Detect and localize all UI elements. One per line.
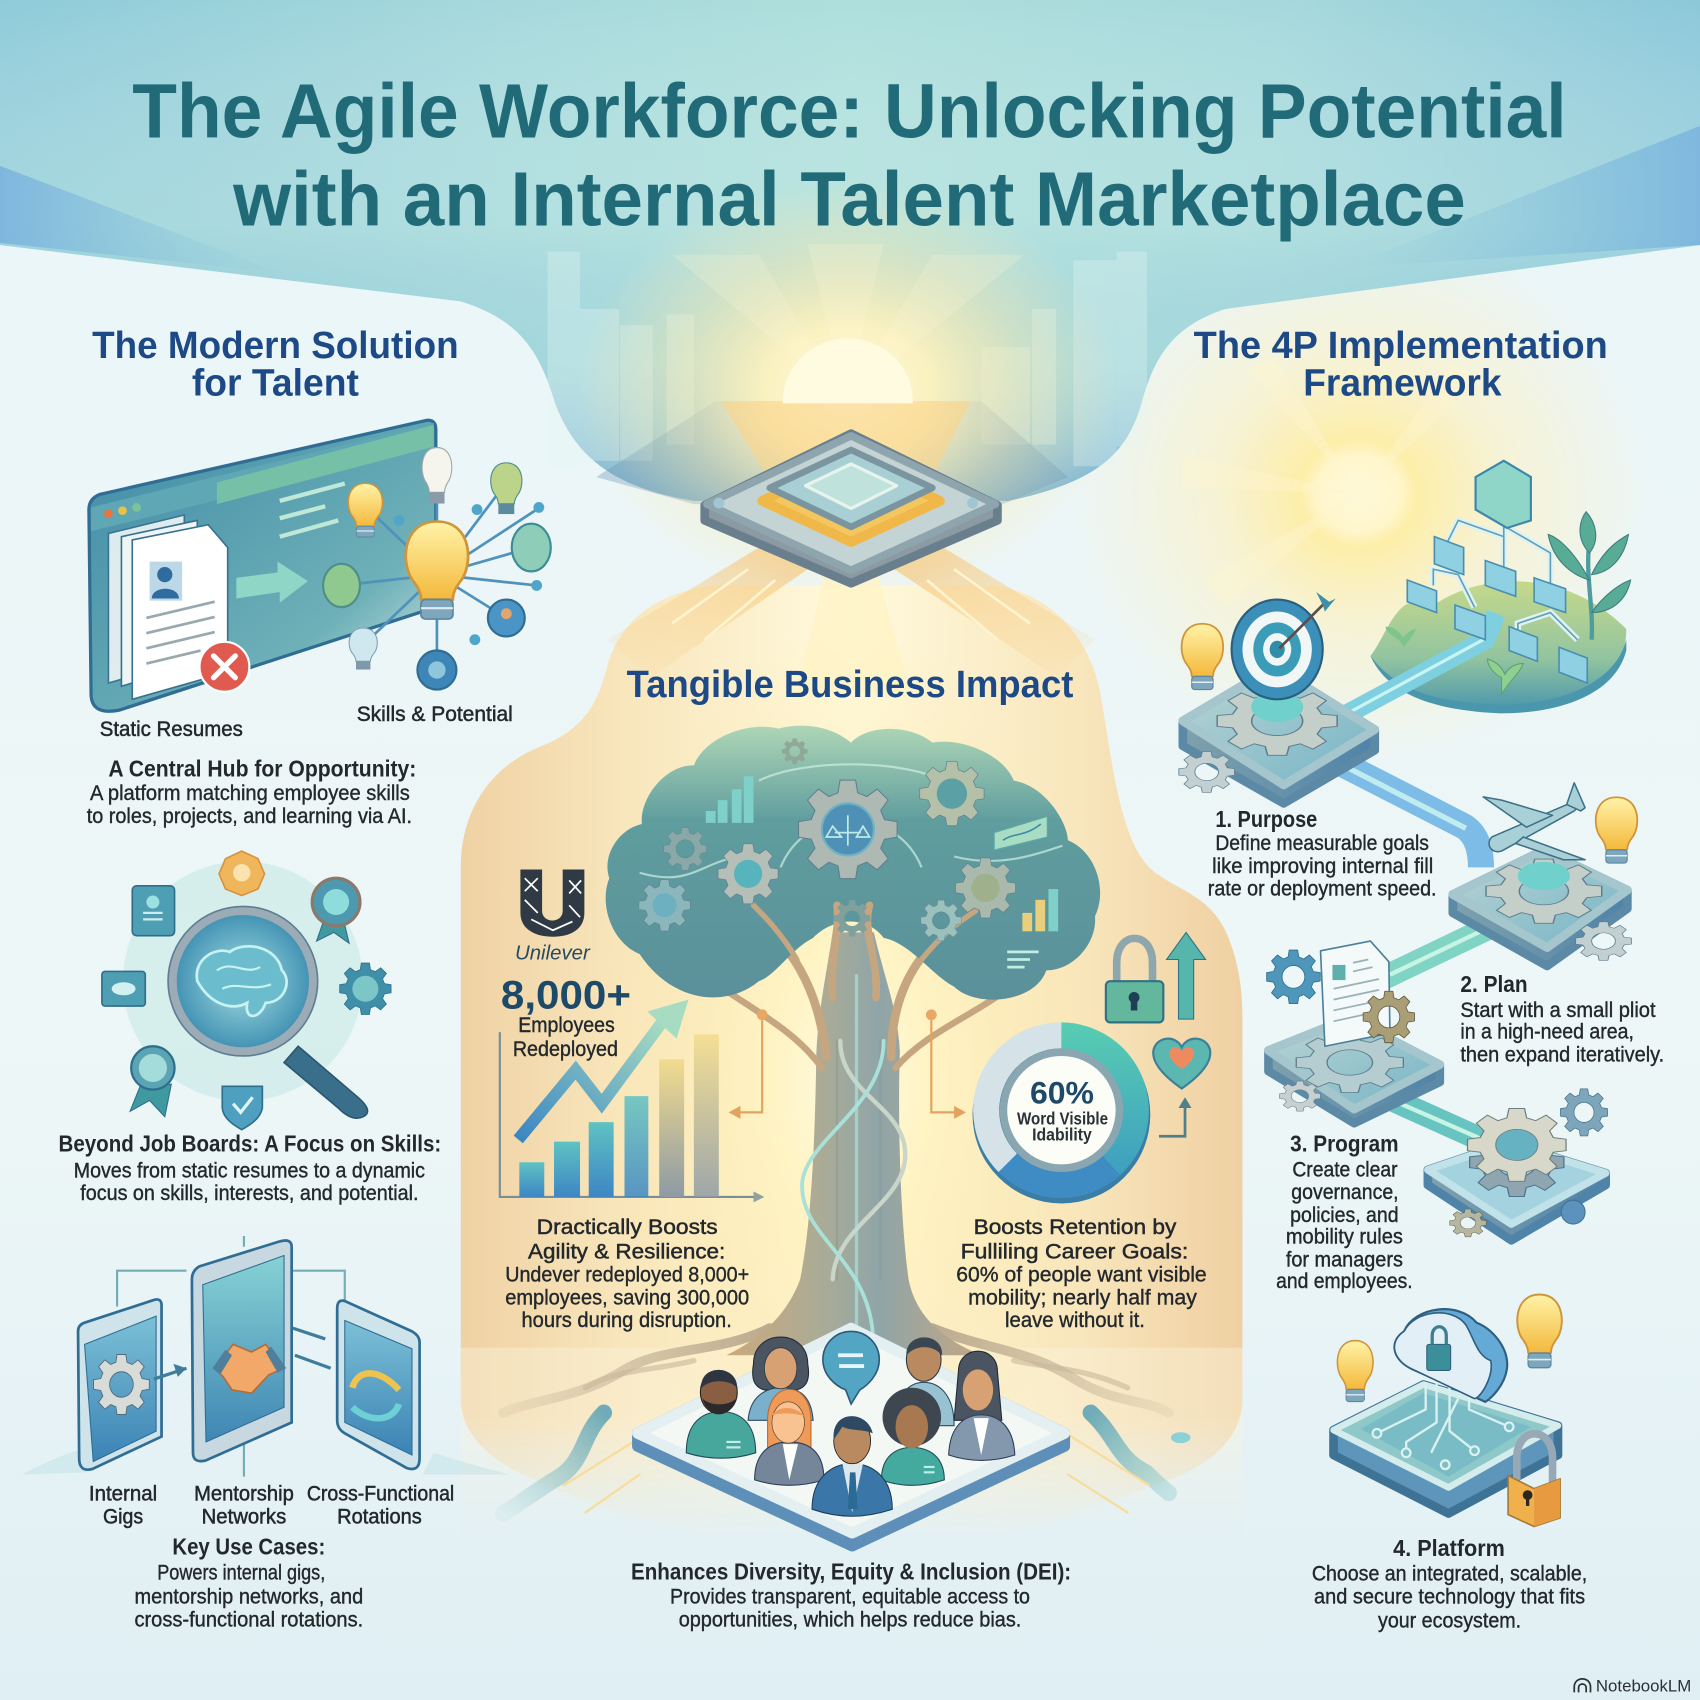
stat: 8,000+ employees redeployed: Redeployed bbox=[513, 1038, 618, 1061]
text: key use cases bbox=[134, 1534, 363, 1631]
text: agility and resilience bbox=[505, 1214, 749, 1332]
step 3 text: Create clear bbox=[1292, 1158, 1398, 1181]
text: DEI: opportunities, which helps reduce bias. bbox=[679, 1608, 1021, 1631]
text: key use cases: Key Use Cases: bbox=[172, 1534, 325, 1560]
person: bearded man bbox=[686, 1370, 756, 1458]
device labels: Mentorship bbox=[194, 1481, 294, 1506]
stat: 8,000+ employees redeployed: 8,000+ bbox=[501, 973, 631, 1017]
device labels bbox=[89, 1481, 454, 1528]
device labels: Cross-Functional bbox=[307, 1481, 454, 1506]
step 1 text: 1. Purpose bbox=[1215, 806, 1317, 832]
text: key use cases: Powers internal gigs, bbox=[157, 1562, 325, 1585]
device labels: Networks bbox=[202, 1503, 286, 1528]
central glow behind tree bbox=[580, 629, 1122, 1540]
translucent skyline and light rays bbox=[548, 179, 1147, 602]
heading: 4P framework bbox=[1194, 325, 1608, 405]
diverse team platform bbox=[638, 1328, 1065, 1546]
illustration: connected devices bbox=[22, 1236, 510, 1477]
title: The Agile Workforce: Unlocking Potential bbox=[132, 69, 1567, 155]
donut chart: 60 percent: Word Visible bbox=[1017, 1108, 1108, 1128]
text: beyond job boards: focus on skills, interests, and potential. bbox=[80, 1182, 418, 1205]
connector right bbox=[926, 1009, 966, 1119]
text: boosts retention: mobility; nearly half may bbox=[968, 1286, 1197, 1309]
step 2 text: Start with a small pliot bbox=[1460, 999, 1656, 1022]
device labels: Rotations bbox=[337, 1503, 422, 1528]
target bbox=[1232, 592, 1336, 699]
step 3 text: mobility rules bbox=[1286, 1226, 1403, 1249]
text: central hub bbox=[87, 755, 416, 828]
cloud with lock bbox=[1394, 1309, 1507, 1402]
text: agility and resilience: Dractically Boosts bbox=[537, 1214, 718, 1239]
unilever logo bbox=[515, 870, 591, 965]
light beams from hub bbox=[607, 548, 1095, 694]
step 1 text: like improving internal fill bbox=[1212, 855, 1433, 878]
text: central hub: to roles, projects, and learning via AI. bbox=[87, 805, 412, 828]
step 3 second platform with big gear bbox=[1428, 1089, 1608, 1240]
step 1 text: Define measurable goals bbox=[1215, 832, 1429, 855]
person: top right bbox=[894, 1337, 954, 1426]
person: orange hair woman bbox=[755, 1389, 824, 1485]
step 3 text bbox=[1276, 1130, 1413, 1293]
text: boosts retention: Fulliling Career Goals: bbox=[961, 1239, 1188, 1264]
step 2 text: 2. Plan bbox=[1460, 971, 1528, 997]
person: right woman bbox=[949, 1351, 1015, 1460]
device labels: Internal bbox=[89, 1481, 157, 1506]
text: boosts retention: 60% of people want visible bbox=[956, 1264, 1207, 1287]
right sun glow bbox=[1066, 222, 1651, 764]
step 4 text: and secure technology that fits bbox=[1314, 1586, 1585, 1609]
text: DEI bbox=[631, 1559, 1071, 1631]
text: boosts retention bbox=[956, 1214, 1207, 1332]
heading: 4P framework: Framework bbox=[1303, 363, 1502, 405]
illustration: resumes to skills window bbox=[89, 420, 551, 711]
step 4 text: 4. Platform bbox=[1393, 1535, 1505, 1561]
step 2 platform and plane bbox=[1453, 783, 1637, 966]
person: top left bbox=[748, 1337, 813, 1420]
text: agility and resilience: hours during disruption. bbox=[521, 1309, 732, 1332]
header band bbox=[0, 0, 1700, 501]
heading: the modern solution: for Talent bbox=[192, 363, 359, 405]
small up arrow bbox=[1159, 1097, 1192, 1136]
heading: the modern solution: The Modern Solution bbox=[92, 325, 459, 367]
step 3 text: 3. Program bbox=[1290, 1130, 1399, 1156]
heading: tangible business impact: Tangible Business Impact bbox=[627, 664, 1074, 706]
step 3 platform, document, gears bbox=[1267, 941, 1440, 1123]
title: with an Internal Talent Marketplace bbox=[232, 157, 1466, 243]
step 3 text: policies, and bbox=[1290, 1204, 1399, 1227]
person: center man bbox=[812, 1416, 892, 1516]
central hub chip bbox=[705, 434, 997, 583]
step 4 cloud platform bbox=[1334, 1295, 1562, 1527]
text: agility and resilience: Agility & Resilience: bbox=[528, 1239, 725, 1264]
step 3 text: for managers bbox=[1286, 1248, 1403, 1271]
donut chart: 60 percent bbox=[973, 1022, 1150, 1203]
plane bbox=[1483, 783, 1585, 860]
device labels: Gigs bbox=[103, 1503, 143, 1528]
step 1 text bbox=[1208, 806, 1437, 901]
orange padlock bbox=[1508, 1434, 1560, 1527]
bar chart with growth arrow bbox=[500, 1000, 764, 1202]
text: agility and resilience: Undever redeployed 8,000+ bbox=[505, 1264, 749, 1287]
stat: 8,000+ employees redeployed bbox=[501, 973, 631, 1061]
bulb bbox=[1182, 624, 1223, 690]
donut chart: 60 percent: 60% bbox=[1030, 1076, 1094, 1111]
step 2 text bbox=[1460, 971, 1664, 1066]
person: curly hair woman bbox=[881, 1388, 944, 1485]
stat: 8,000+ employees redeployed: Employees bbox=[518, 1014, 615, 1037]
step 3 text: and employees. bbox=[1276, 1270, 1413, 1293]
step 4 text: Choose an integrated, scalable, bbox=[1312, 1563, 1587, 1586]
donut chart: 60 percent: Idability bbox=[1032, 1125, 1092, 1145]
text: boosts retention: leave without it. bbox=[1005, 1309, 1145, 1332]
step 4 text: your ecosystem. bbox=[1378, 1609, 1521, 1632]
text: beyond job boards bbox=[59, 1130, 441, 1205]
connector left bbox=[729, 1009, 768, 1119]
lock and arrow icons bbox=[1106, 932, 1206, 1022]
notebooklm mark: NotebookLM bbox=[1596, 1676, 1691, 1695]
step 4 text bbox=[1312, 1535, 1587, 1632]
step 2 text: then expand iteratively. bbox=[1460, 1043, 1664, 1066]
text: agility and resilience: employees, saving 300,000 bbox=[505, 1286, 749, 1309]
step 1 text: rate or deployment speed. bbox=[1208, 878, 1437, 901]
text: boosts retention: Boosts Retention by bbox=[974, 1214, 1176, 1239]
text: central hub: A Central Hub for Opportunity: bbox=[108, 755, 416, 781]
water droplet bbox=[1171, 1432, 1190, 1443]
title bbox=[132, 69, 1567, 243]
heading: the modern solution bbox=[92, 325, 459, 405]
label: skills and potential: Skills & Potential bbox=[357, 701, 513, 726]
label: static resumes: Static Resumes bbox=[100, 716, 243, 741]
unilever logo: Unilever bbox=[515, 942, 591, 965]
text: DEI: Enhances Diversity, Equity & Inclusion (DEI): bbox=[631, 1559, 1071, 1585]
text: key use cases: cross-functional rotations. bbox=[134, 1608, 363, 1631]
speech bubble bbox=[823, 1331, 879, 1404]
step 2 text: in a high-need area, bbox=[1460, 1021, 1634, 1044]
growth island with org chart bbox=[1328, 461, 1631, 724]
central panel: tangible business impact background bbox=[461, 585, 1242, 1550]
tree roots bbox=[503, 1328, 1169, 1514]
step 1 platform and target bbox=[1179, 592, 1375, 803]
tree bbox=[606, 726, 1100, 1355]
text: key use cases: mentorship networks, and bbox=[134, 1586, 363, 1609]
heading: 4P framework: The 4P Implementation bbox=[1194, 325, 1608, 367]
heart icon bbox=[1153, 1039, 1210, 1089]
text: beyond job boards: Beyond Job Boards: A Focus on Skills: bbox=[59, 1130, 441, 1156]
text: central hub: A platform matching employee skills bbox=[90, 782, 410, 805]
step 3 text: governance, bbox=[1291, 1181, 1399, 1204]
text: DEI: Provides transparent, equitable access to bbox=[670, 1586, 1030, 1609]
pipes between platforms bbox=[1328, 757, 1502, 1144]
illustration: magnifier and skills bbox=[102, 851, 391, 1130]
text: beyond job boards: Moves from static resumes to a dynamic bbox=[74, 1159, 425, 1182]
